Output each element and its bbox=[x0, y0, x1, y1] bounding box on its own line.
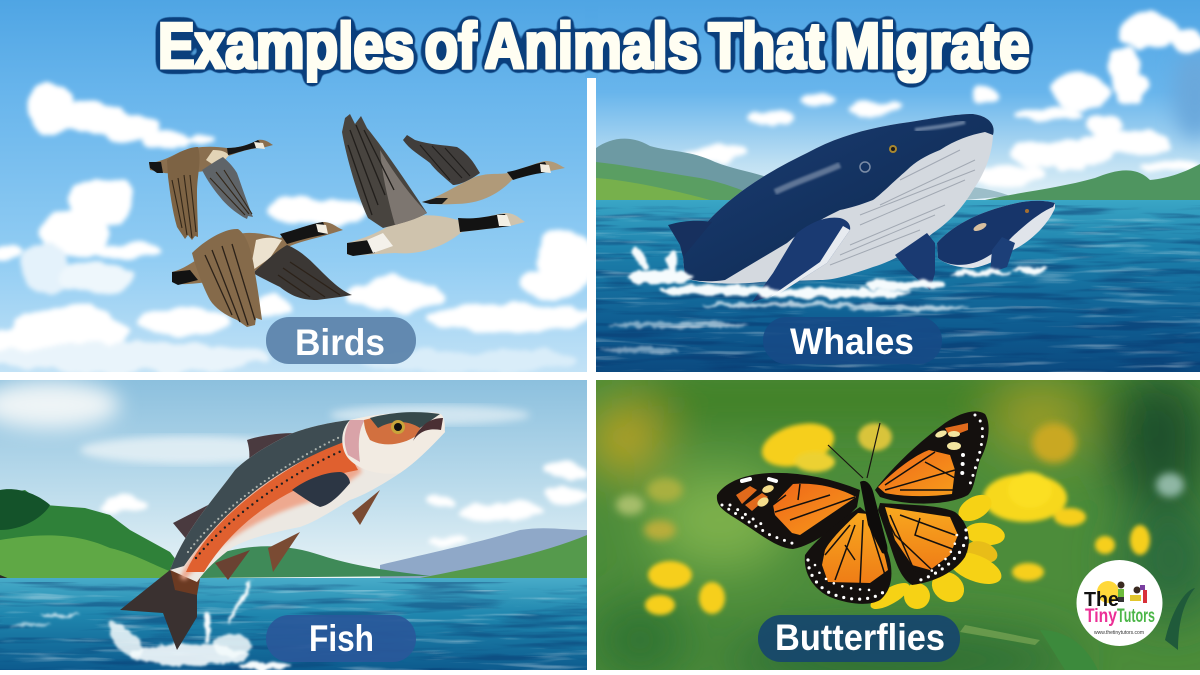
whale: small bbox=[937, 201, 1055, 273]
panel: birds bbox=[0, 0, 595, 373]
whale: large bbox=[668, 114, 994, 302]
label: birds bbox=[266, 317, 416, 364]
logo: The Tiny Tutors: Tutors bbox=[1117, 606, 1155, 627]
salmon bbox=[120, 412, 445, 650]
goose: large center bbox=[342, 114, 525, 256]
label: butterflies: Butterflies bbox=[775, 617, 945, 658]
label: fish: Fish bbox=[309, 618, 374, 659]
panel: fish bbox=[0, 380, 589, 670]
panel: whales bbox=[596, 0, 1200, 372]
clouds: whales sky bbox=[681, 12, 1200, 185]
flower behind butterfly bbox=[870, 494, 1005, 609]
top sky band behind title bbox=[585, 0, 598, 78]
clouds: birds sky bbox=[0, 82, 595, 373]
logo sun icon bbox=[1097, 581, 1119, 603]
label: whales bbox=[763, 317, 942, 364]
water splash: fish bbox=[10, 579, 291, 670]
goose: upper left bbox=[149, 140, 273, 240]
title: Examples of Animals That Migrate bbox=[158, 10, 1030, 82]
clouds: fish sky bbox=[0, 381, 589, 544]
label: birds: Birds bbox=[295, 322, 385, 363]
hills: fish background bbox=[0, 489, 587, 578]
blurred flowers and foliage bbox=[590, 370, 1200, 675]
water splash: whales bbox=[600, 244, 1048, 353]
water: fish bbox=[0, 578, 587, 670]
hills: whales background bbox=[596, 139, 1200, 200]
goose: lower left bbox=[172, 222, 352, 327]
label: whales: Whales bbox=[790, 321, 914, 362]
goose: upper right bbox=[403, 135, 565, 204]
logo: The Tiny Tutors: The bbox=[1084, 589, 1119, 611]
logo: The Tiny Tutors bbox=[1076, 560, 1162, 646]
water: whales bbox=[596, 200, 1200, 372]
logo: The Tiny Tutors: www.thetinytutors.com bbox=[1094, 630, 1144, 636]
logo: The Tiny Tutors: Tiny bbox=[1085, 606, 1117, 627]
label: fish bbox=[266, 615, 416, 662]
monarch butterfly bbox=[717, 411, 989, 604]
logo children icons bbox=[1118, 582, 1147, 603]
panel: butterflies bbox=[590, 370, 1200, 675]
foliage leaves bbox=[960, 588, 1195, 675]
